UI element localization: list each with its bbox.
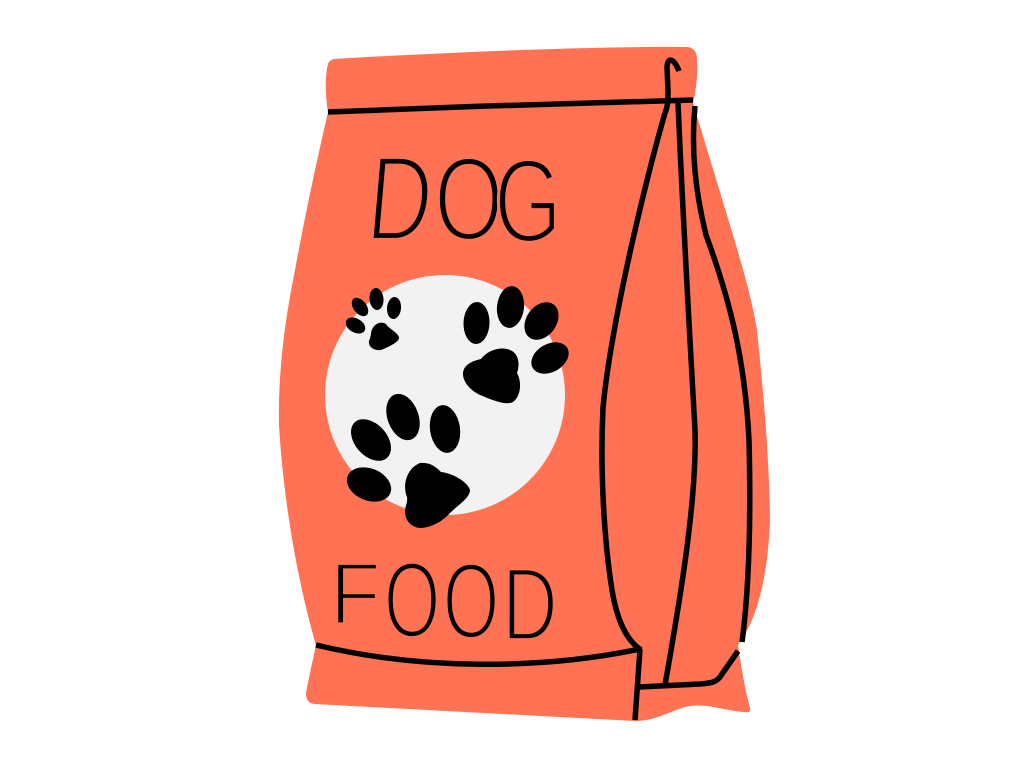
heading: FOOD: O: [443, 542, 499, 661]
heading: DOG: G: [494, 136, 562, 268]
left gusset line: [602, 113, 665, 650]
heading: FOOD: [330, 541, 558, 663]
front bottom seam: [316, 645, 640, 664]
hook fold: [665, 60, 679, 113]
right gusset line: [693, 106, 750, 642]
paw: bottom left: [342, 389, 470, 528]
front right edge: [635, 649, 640, 720]
white circle: [325, 275, 565, 515]
heading: DOG: O: [434, 134, 504, 266]
heading: DOG: D: [362, 130, 439, 266]
paw: small top left: [343, 287, 402, 350]
heading: FOOD: O: [384, 541, 440, 660]
bag body: [279, 47, 770, 721]
centre gusset line: [665, 103, 695, 685]
heading: FOOD: D: [502, 547, 558, 663]
paw: top right: [463, 285, 574, 403]
gusset bottom fold: [639, 651, 738, 687]
heading: FOOD: F: [330, 545, 381, 644]
top seam: [328, 100, 693, 112]
heading: DOG: [362, 130, 562, 268]
